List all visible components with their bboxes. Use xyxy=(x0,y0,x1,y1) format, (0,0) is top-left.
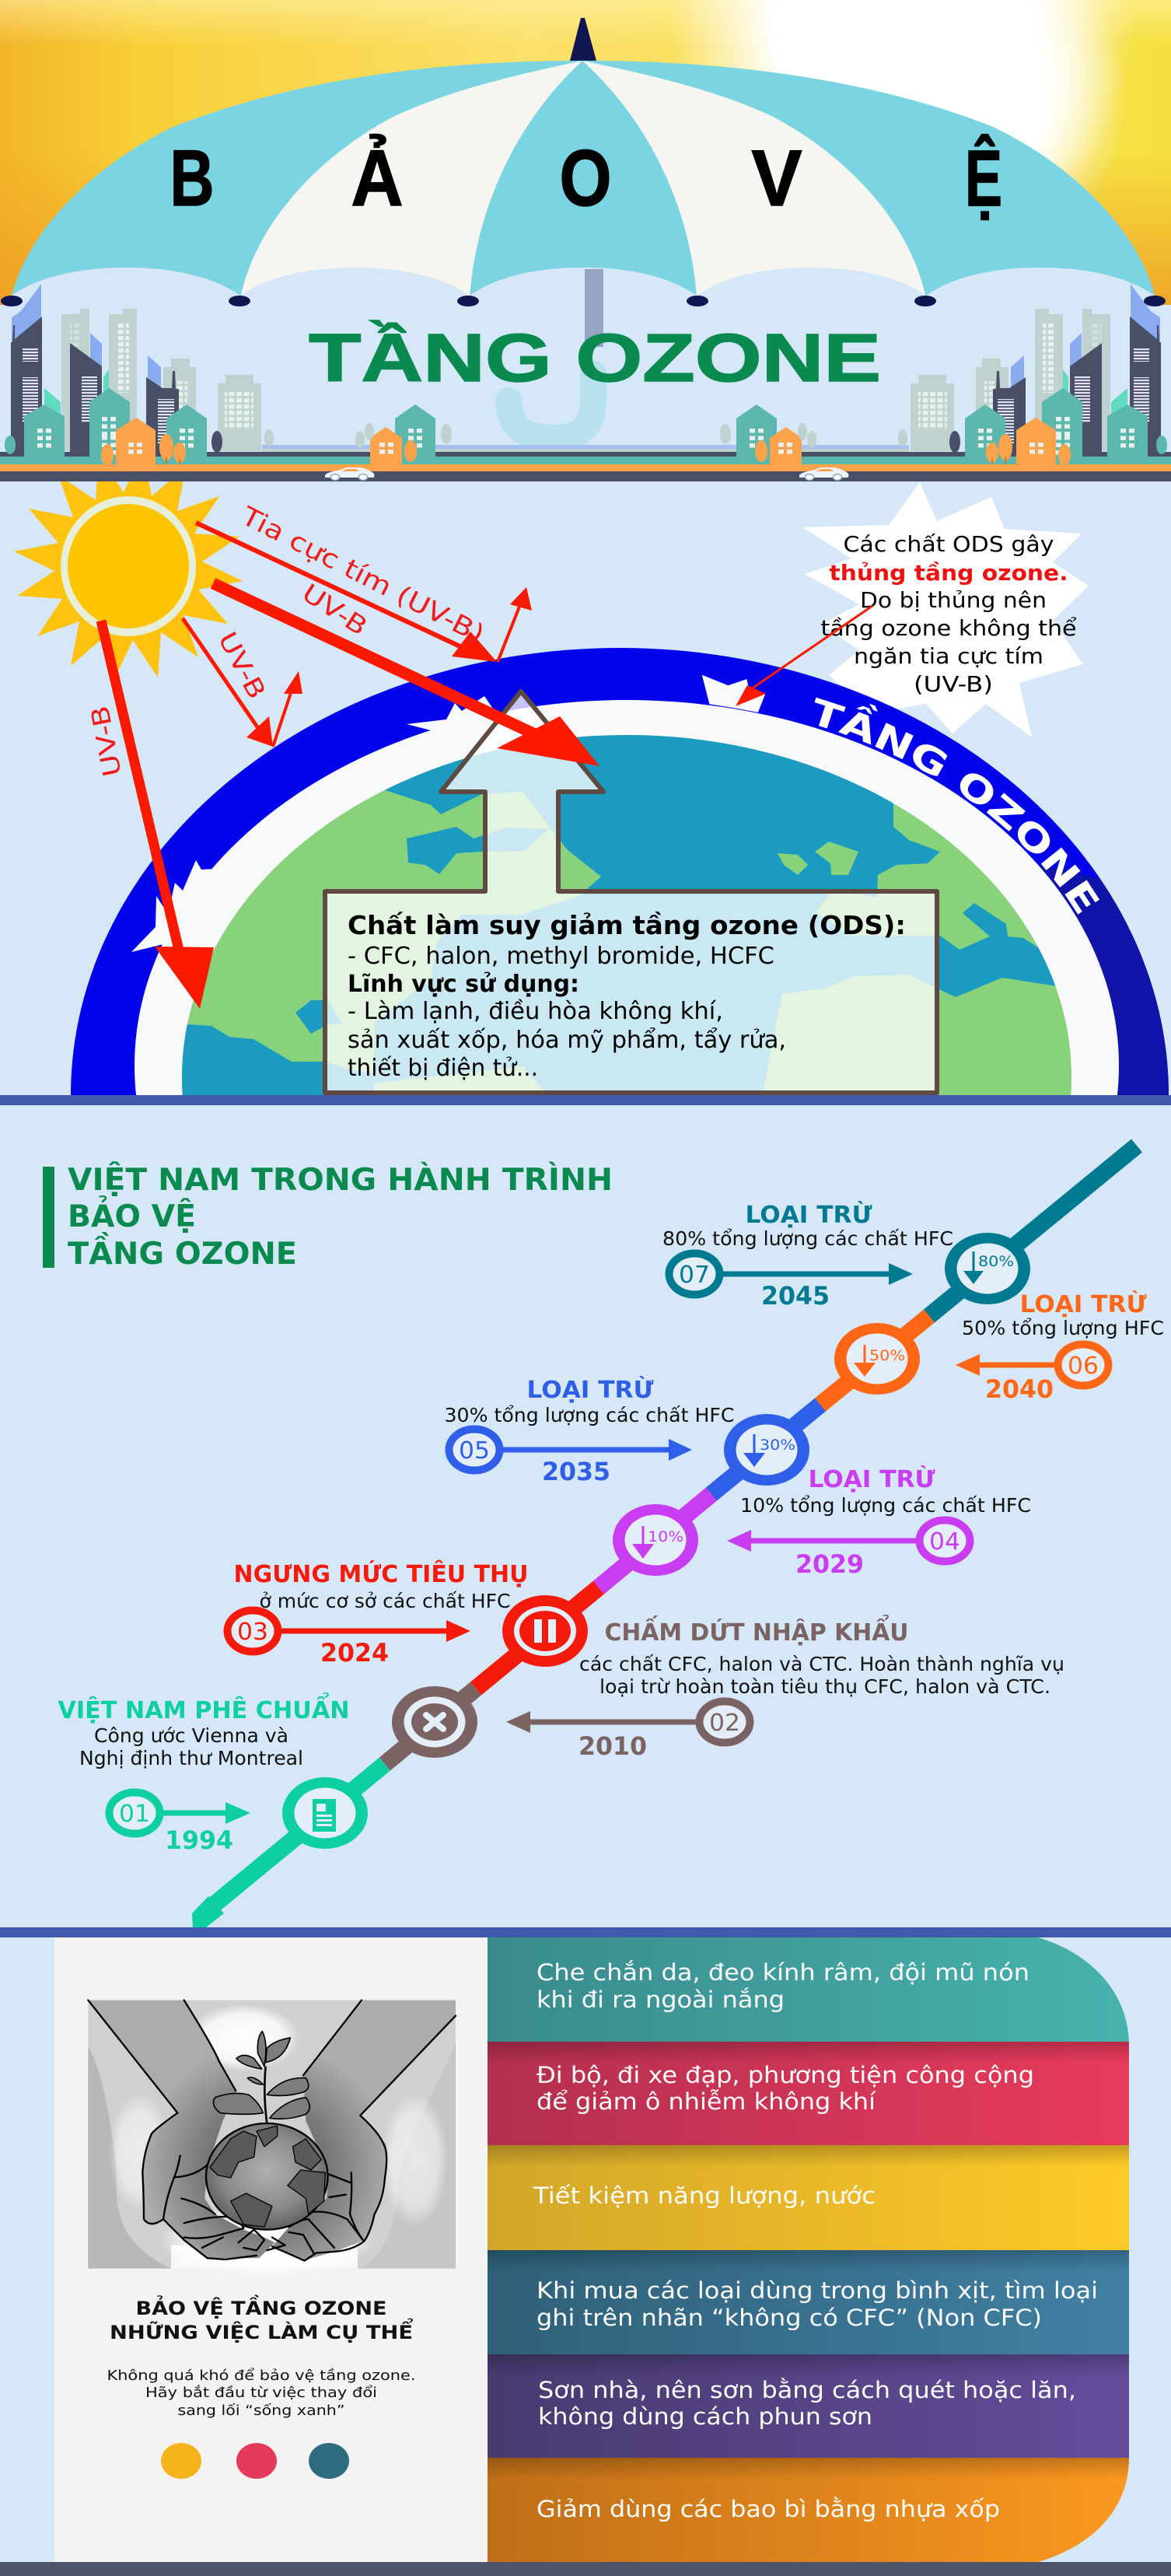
step 06 xyxy=(956,1290,1164,1404)
sky with sun flare xyxy=(0,0,1171,305)
band: sun protection: Che chắn da, đeo kính râm, đội mũ nón xyxy=(537,1959,1029,1986)
step 02: loại trừ hoàn toàn tiêu thụ CFC, halon và CTC. xyxy=(599,1675,1050,1698)
callout text: Do bị thủng nên xyxy=(860,587,1047,613)
header panel xyxy=(0,0,1171,481)
cars xyxy=(325,467,375,481)
band: save energy xyxy=(488,2145,1129,2250)
text: panel title xyxy=(110,2294,414,2343)
band: sun protection: khi đi ra ngoài nắng xyxy=(537,1986,785,2013)
label: UV-B main ray: UV-B xyxy=(297,578,372,642)
title: BẢO VỆ: V xyxy=(751,134,802,222)
heading: BẢO VỆ xyxy=(68,1195,196,1234)
band: save energy: Tiết kiệm năng lượng, nước xyxy=(533,2182,876,2209)
earth globe xyxy=(182,735,1071,1095)
curved label: TẦNG OZONE: TẦNG OZONE xyxy=(815,697,1099,915)
callout text: tầng ozone không thể xyxy=(821,615,1076,641)
panel: sun and ozone layer diagram xyxy=(14,481,1169,1095)
text: ODS substances: thiết bị điện tử... xyxy=(348,1055,538,1082)
umbrella tips xyxy=(1,296,1166,306)
end of the line bottom xyxy=(192,1896,224,1928)
arrow: callout pointer xyxy=(736,606,872,706)
label: Tia cực tím: Tia cực tím (UV-B) xyxy=(236,500,489,649)
text: panel intro: Hãy bắt đầu từ việc thay đổi xyxy=(145,2385,377,2401)
node: 2045 80%: 80% xyxy=(978,1253,1014,1270)
callout text: thủng tầng ozone. xyxy=(829,560,1068,586)
step 04: 2029 xyxy=(795,1549,864,1579)
step 03: 2024 xyxy=(320,1638,389,1668)
band: non CFC sprays xyxy=(488,2250,1129,2354)
step 03: ở mức cơ sở các chất HFC xyxy=(260,1590,510,1612)
band: painting: không dùng cách phun sơn xyxy=(538,2403,872,2430)
band: green transport xyxy=(488,2042,1129,2145)
step 02 xyxy=(506,1615,1064,1761)
arrow: UV-B short reflected ray xyxy=(183,618,302,747)
step 01: 1994 xyxy=(165,1825,233,1855)
heading: TẦNG OZONE xyxy=(68,1231,297,1272)
node: 2029 10% xyxy=(613,1504,698,1576)
step 01: Nghị định thư Montreal xyxy=(79,1747,303,1769)
section divider xyxy=(0,1095,1171,1105)
step 07: 07 xyxy=(679,1262,710,1289)
panel: Vietnam timeline xyxy=(43,1146,1164,1928)
heading xyxy=(68,1161,613,1272)
step 05: 30% tổng lượng các chất HFC xyxy=(445,1404,734,1426)
text: panel intro: sang lối “sống xanh” xyxy=(177,2403,345,2419)
ozone layer ring xyxy=(71,648,1169,1095)
info box with upward arrow xyxy=(325,691,937,1093)
step 04: LOẠI TRỪ xyxy=(809,1465,935,1493)
callout text: Các chất ODS gây xyxy=(843,531,1054,557)
title: BẢO VỆ: B xyxy=(170,134,215,222)
title: BẢO VỆ: O xyxy=(560,134,611,222)
band: green transport: Đi bộ, đi xe đạp, phương tiện công cộng xyxy=(537,2062,1034,2088)
text: panel title: NHỮNG VIỆC LÀM CỤ THỂ xyxy=(110,2317,414,2343)
step 04: 04 xyxy=(929,1528,960,1556)
text: ODS substances: Chất làm suy giảm tầng ozone (ODS): xyxy=(348,910,906,940)
city skyline xyxy=(0,284,1171,481)
step 01: 01 xyxy=(119,1801,150,1828)
node: 2035 30% xyxy=(724,1414,809,1486)
step 07: 80% tổng lượng các chất HFC xyxy=(662,1227,953,1250)
heading bar xyxy=(43,1167,54,1268)
text: panel intro: Không quá khó để bảo vệ tầng ozone. xyxy=(107,2368,415,2384)
band: non CFC sprays: Khi mua các loại dùng trong bình xịt, tìm loại xyxy=(537,2277,1098,2304)
node: 2040 50% xyxy=(834,1323,920,1395)
callout text: (UV-B) xyxy=(914,671,993,697)
sprout xyxy=(213,2032,309,2123)
action bands xyxy=(488,1937,1129,2562)
arrow: UV-B ray to the earth xyxy=(101,621,214,1009)
left panel xyxy=(54,1937,488,2562)
band: painting xyxy=(488,2354,1129,2458)
node: 1994 ratified xyxy=(282,1777,368,1849)
colored dots xyxy=(161,2443,349,2479)
node: 2045 80% xyxy=(945,1233,1030,1304)
heading: VIỆT NAM TRONG HÀNH TRÌNH xyxy=(68,1161,613,1198)
step 01 xyxy=(58,1692,350,1855)
text: ODS substances: Lĩnh vực sử dụng: xyxy=(348,971,579,998)
text: ODS substances: - Làm lạnh, điều hòa không khí, xyxy=(348,998,723,1025)
node: 2029 10%: 10% xyxy=(648,1528,683,1545)
title: BẢO VỆ: Ệ xyxy=(965,134,1002,222)
holes in the ozone layer xyxy=(131,675,765,952)
step 02: 02 xyxy=(709,1710,740,1737)
title: BẢO VỆ: Ả xyxy=(351,134,403,222)
image: hands holding earth xyxy=(88,2000,456,2277)
step 03: 03 xyxy=(237,1619,268,1646)
umbrella handle xyxy=(585,269,603,347)
step 05: LOẠI TRỪ xyxy=(527,1375,653,1404)
label: UV-B left ray: UV-B xyxy=(85,703,128,779)
title: TẦNG OZONE: TẦNG OZONE xyxy=(309,320,881,396)
step 01: Công ước Vienna và xyxy=(94,1724,288,1747)
step 03 xyxy=(227,1559,529,1668)
diagonal timeline line xyxy=(214,1146,1137,1905)
step 03: NGƯNG MỨC TIÊU THỤ xyxy=(233,1559,529,1588)
label: UV-B short ray: UV-B xyxy=(212,627,272,704)
node: 2035 30%: 30% xyxy=(760,1437,795,1454)
title: BẢO VỆ xyxy=(170,134,1002,222)
text: panel intro xyxy=(107,2368,415,2419)
callout text: ngăn tia cực tím xyxy=(854,643,1043,669)
step 04 xyxy=(727,1465,1031,1579)
step 05: 2035 xyxy=(542,1457,610,1486)
node: 2024 stop consumption xyxy=(502,1595,588,1667)
bottom bar xyxy=(0,2562,1171,2576)
step 02: CHẤM DỨT NHẬP KHẨU xyxy=(605,1615,908,1647)
node: 2010 stop import xyxy=(392,1686,477,1758)
step 06: LOẠI TRỪ xyxy=(1020,1290,1146,1318)
band: foam packaging: Giảm dùng các bao bì bằng nhựa xốp xyxy=(537,2496,1000,2522)
node: 2040 50%: 50% xyxy=(869,1347,905,1364)
callout: white burst xyxy=(802,482,1089,737)
section divider xyxy=(0,1927,1171,1937)
step 07: LOẠI TRỪ xyxy=(745,1200,872,1229)
step 06: 06 xyxy=(1068,1353,1099,1380)
band: painting: Sơn nhà, nên sơn bằng cách quét hoặc lăn, xyxy=(538,2377,1076,2403)
globe in hands xyxy=(206,2123,328,2230)
text: ODS substances: - CFC, halon, methyl bromide, HCFC xyxy=(348,943,774,970)
step 02: 2010 xyxy=(579,1731,647,1761)
text: panel title: BẢO VỆ TẦNG OZONE xyxy=(135,2294,387,2319)
panel: concrete actions xyxy=(54,1937,1129,2562)
step 06: 50% tổng lượng HFC xyxy=(962,1317,1164,1339)
icon: umbrella xyxy=(0,18,1171,467)
callout text xyxy=(821,531,1076,697)
step 01: VIỆT NAM PHÊ CHUẨN xyxy=(58,1692,350,1724)
band: sun protection xyxy=(488,1937,1129,2042)
band: foam packaging xyxy=(488,2458,1129,2562)
arrow: UV-B reflected ray xyxy=(196,523,532,662)
text: ODS substances xyxy=(348,910,906,1082)
step 02: các chất CFC, halon và CTC. Hoàn thành nghĩa vụ xyxy=(579,1653,1064,1675)
arrow: UV-B ray through the hole xyxy=(213,583,599,766)
step 07 xyxy=(662,1200,953,1311)
step 05: 05 xyxy=(459,1437,490,1465)
icon: sun xyxy=(14,481,243,677)
band: green transport: để giảm ô nhiễm không khí xyxy=(537,2088,876,2115)
step 05 xyxy=(445,1375,734,1486)
step 07: 2045 xyxy=(761,1281,830,1311)
text: ODS substances: sản xuất xốp, hóa mỹ phẩm, tẩy rửa, xyxy=(348,1026,786,1054)
band: non CFC sprays: ghi trên nhãn “không có CFC” (Non CFC) xyxy=(537,2305,1042,2331)
step 04: 10% tổng lượng các chất HFC xyxy=(740,1494,1031,1517)
step 06: 2040 xyxy=(985,1374,1054,1404)
